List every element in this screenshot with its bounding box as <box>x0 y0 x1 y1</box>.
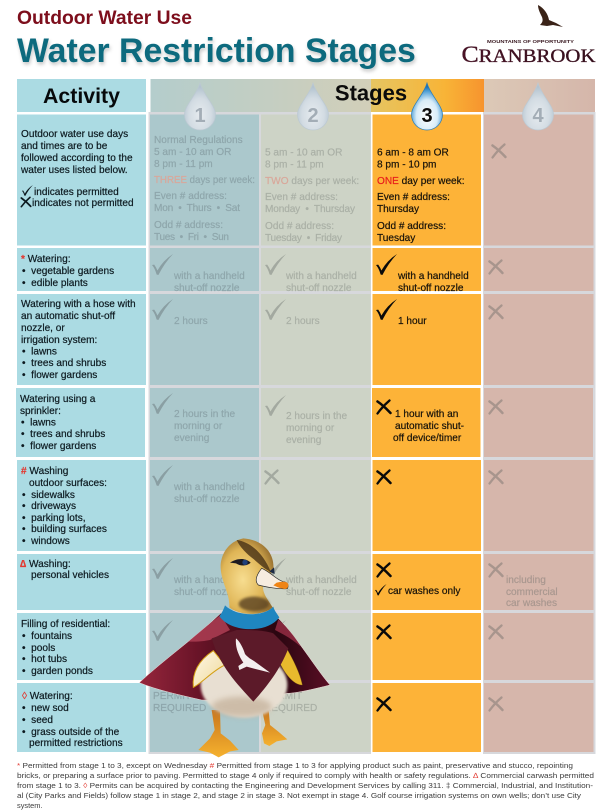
text: activity sprinkler: sprinkler: <box>20 406 61 417</box>
duck chest shield <box>212 630 288 702</box>
text: activity intro and legend: and times are to be <box>21 141 108 152</box>
text: activity sprinkler: • flower gardens <box>21 441 96 452</box>
duck beak <box>256 568 288 589</box>
text: activity hose watering: • trees and shrubs <box>22 358 106 369</box>
icon: drop stage 1 <box>184 83 216 130</box>
text: stage 2 regulations: Even # address: <box>265 192 338 203</box>
text: activity intro and legend: indicates permitted <box>34 187 119 198</box>
text: activity washing surfaces: • building surfaces <box>22 524 107 535</box>
stage 4 row marks and notes: commercial <box>506 587 558 598</box>
text: stage 1 regulations <box>154 135 255 243</box>
duck cape highlights <box>188 615 301 647</box>
text: stage 2 regulations: 5 am - 10 am OR <box>265 148 342 158</box>
stage 2 row marks and notes: morning or <box>286 423 335 434</box>
text: activity watering vegetables <box>21 254 114 289</box>
duck neck shading <box>239 597 269 611</box>
stage 1 row marks and notes: 2 hours in the <box>174 409 236 420</box>
text: stage 1 regulations: THREE days per week: <box>154 175 255 186</box>
logo tagline: MOUNTAINS OF OPPORTUNITY <box>487 39 575 45</box>
stage 2 row marks and notes: PERMIT <box>264 691 302 702</box>
text: stage 2 regulations: Odd # address: <box>265 221 334 232</box>
text: activity filling: • pools <box>22 643 55 654</box>
text: activity new sod: • seed <box>22 715 53 726</box>
stage 3 row marks and notes: automatic shut- <box>395 421 464 432</box>
footnotes: system. <box>17 801 42 810</box>
duck head and neck <box>221 538 273 614</box>
stage 2 row marks and notes: with a handheld <box>285 271 357 282</box>
stage 4 row marks and notes <box>490 144 558 710</box>
duck legs and feet <box>198 710 287 757</box>
duck eye <box>230 559 275 574</box>
icon: drop stage 3 <box>412 83 442 130</box>
text: stage 1 regulations: Normal Regulations <box>154 135 243 146</box>
text: activity watering vegetables: • edible plants <box>22 278 88 289</box>
text: stage 3 regulations: Even # address: <box>377 192 450 203</box>
text: stage 3 regulations: ONE day per week: <box>377 176 465 187</box>
text: stage 3 regulations: Odd # address: <box>377 221 446 232</box>
stage 3 row marks and notes: 1 hour with an <box>395 409 458 420</box>
footnotes <box>17 761 594 810</box>
icon: drop stage 2 <box>298 83 328 130</box>
text: stage 1 regulations: Even # address: <box>154 191 227 202</box>
stage 2 row marks and notes: evening <box>286 435 321 446</box>
panel: stages header band: Stages <box>335 80 407 106</box>
text: activity sprinkler <box>20 394 105 452</box>
text: activity washing surfaces <box>21 466 107 547</box>
panel: stage 1 column cells <box>150 114 259 752</box>
panel: activity column cells <box>16 114 146 752</box>
stage 2 row marks and notes: 2 hours in the <box>286 411 348 422</box>
stage 1 row marks and notes: shut-off nozzle <box>174 587 240 598</box>
text: activity new sod: ◊ Watering: <box>22 691 73 702</box>
text: activity intro and legend: water uses listed below. <box>20 165 128 176</box>
stage 1 row marks and notes: with a handheld <box>173 575 245 586</box>
stage 4 row marks and notes: including <box>506 575 546 586</box>
icon: drop stage 4: 4 <box>532 105 544 127</box>
stage 1 row marks and notes: with a handheld <box>173 482 245 493</box>
text: stage 1 regulations: Tues • Fri • Sun <box>154 232 229 243</box>
stage 3 row marks and notes: with a handheld <box>397 271 469 282</box>
stage 3 row marks and notes: off device/timer <box>393 433 462 444</box>
text: activity new sod: • grass outside of the <box>22 727 120 738</box>
text: activity washing vehicles: ∆ Washing: <box>20 559 71 570</box>
stage 1 row marks and notes: with a handheld <box>173 271 245 282</box>
text: activity hose watering <box>21 299 136 381</box>
text: activity washing surfaces: • sidewalks <box>22 490 75 501</box>
subtitle: Outdoor Water Use <box>17 8 192 29</box>
footnotes: from stage 1 to 3. ◊ Permits can be acquired by contacting the Engineering and Development Services by calling 311. ‡ Commercial, Industrial, and Institution- <box>17 781 594 790</box>
text: activity filling: • garden ponds <box>22 666 93 677</box>
text: activity new sod <box>22 691 123 749</box>
logo: Cranbrook <box>462 5 596 67</box>
text: activity filling: • hot tubs <box>22 654 67 665</box>
text: stage 2 regulations <box>265 148 359 244</box>
stage 1 row marks and notes: REQUIRED <box>153 703 206 714</box>
stage 3 row marks and notes: shut-off nozzle <box>398 283 464 294</box>
text: stage 3 regulations <box>377 148 465 244</box>
mascot: duck in cape <box>139 538 330 757</box>
text: activity sprinkler: Watering using a <box>20 394 96 405</box>
stage 1 row marks and notes: evening <box>174 433 209 444</box>
icon: drop stage 1: 1 <box>194 105 206 127</box>
stage 2 row marks and notes: shut-off nozzle <box>286 587 352 598</box>
stage 2 row marks and notes: shut-off nozzle <box>286 283 352 294</box>
stage 2 row marks and notes: 2 hours <box>286 316 320 327</box>
stage 1 row marks and notes: shut-off nozzle <box>174 283 240 294</box>
text: stage 1 regulations: Mon • Thurs • Sat <box>154 203 240 214</box>
text: activity washing surfaces: • driveways <box>22 501 76 512</box>
panel: stage 2 column cells <box>261 114 370 752</box>
panel: activity header: Activity <box>43 84 120 108</box>
text: activity sprinkler: • trees and shrubs <box>21 429 105 440</box>
text: activity sprinkler: • lawns <box>21 418 56 428</box>
stage 4 row marks and notes: car washes <box>506 598 557 609</box>
text: activity watering vegetables: • vegetable gardens <box>22 266 114 277</box>
duck collar <box>219 605 279 629</box>
stage 3 row marks and notes: car washes only <box>388 586 461 597</box>
text: activity filling <box>21 619 110 677</box>
icon: drop stage 4 <box>522 83 554 130</box>
text: stage 3 regulations: 6 am - 8 am OR <box>377 148 449 158</box>
text: stage 3 regulations: 8 pm - 10 pm <box>377 160 436 170</box>
duck belly <box>201 652 287 718</box>
text: activity washing vehicles: personal vehicles <box>31 570 109 581</box>
text: stage 1 regulations: 8 pm - 11 pm <box>154 159 213 170</box>
text: stage 2 regulations: TWO days per week: <box>265 176 359 187</box>
text: activity hose watering: • lawns <box>22 346 57 358</box>
panel: stage 3 column cells <box>372 114 481 752</box>
text: stage 2 regulations: Tuesday • Friday <box>265 233 343 244</box>
icon: drop stage 3: 3 <box>421 105 433 127</box>
icon: eagle <box>538 5 563 27</box>
text: activity filling: Filling of residential: <box>21 619 110 630</box>
stage 1 row marks and notes: PERMIT <box>153 691 191 702</box>
text: stage 1 regulations: Odd # address: <box>154 220 223 231</box>
text: activity intro and legend: followed according to the <box>21 153 133 164</box>
text: activity hose watering: • flower gardens <box>22 370 97 381</box>
duck shield bird emblem <box>236 638 270 673</box>
duck wings <box>193 648 302 687</box>
logo wordmark: CRANBROOK <box>462 42 596 67</box>
stage 3 row marks and notes <box>375 254 469 710</box>
text: activity hose watering: Watering with a hose with <box>21 299 136 310</box>
stage 2 row marks and notes: with a handheld <box>285 575 357 586</box>
duck cape <box>139 613 330 702</box>
icon: drop stage 2: 2 <box>307 105 319 127</box>
text: activity watering vegetables: * Watering: <box>21 254 71 265</box>
stage 1 row marks and notes: 2 hours <box>174 316 208 327</box>
stage 2 row marks and notes <box>264 254 357 714</box>
panel: stages header band <box>150 79 595 112</box>
text: activity washing surfaces: outdoor surfaces: <box>29 478 107 489</box>
text: activity hose watering: irrigation system: <box>21 335 97 346</box>
text: activity intro and legend: Outdoor water use days <box>21 129 128 140</box>
text: stage 2 regulations: Monday • Thursday <box>265 204 356 215</box>
text: stage 2 regulations: 8 pm - 11 pm <box>265 160 324 170</box>
text: activity hose watering: nozzle, or <box>21 323 65 334</box>
stage 1 row marks and notes <box>152 254 245 714</box>
footnotes: * Permitted from stage 1 to 3, except on Wednesday # Permitted from stage 1 to 3 for applying product such as paint, preservative and stucco, repointing <box>17 761 573 770</box>
text: activity intro and legend <box>20 129 134 209</box>
duck head stripe <box>237 540 271 572</box>
text: activity intro and legend: indicates not permitted <box>32 198 134 209</box>
text: activity filling: • fountains <box>22 631 72 642</box>
stage 3 row marks and notes: 1 hour <box>398 316 427 327</box>
stage 1 row marks and notes: shut-off nozzle <box>174 494 240 505</box>
text: stage 1 regulations: 5 am - 10 am OR <box>154 147 231 158</box>
panel: activity header <box>17 79 146 112</box>
panel: stage 4 column cells <box>484 114 594 752</box>
text: activity new sod: permitted restrictions <box>29 738 123 749</box>
text: stage 3 regulations: Tuesday <box>377 233 416 244</box>
text: activity new sod: • new sod <box>22 703 69 714</box>
table grid background <box>148 112 596 754</box>
text: activity washing vehicles <box>20 559 109 581</box>
text: activity washing surfaces: • windows <box>22 536 70 547</box>
text: stage 3 regulations: Thursday <box>377 204 420 215</box>
stage 1 row marks and notes: morning or <box>174 421 223 432</box>
footnotes: al (City Parks and Fields) follow stage 1 in stage 2, and stage 2 in stage 3. Not exempt in stage 4. Golf course irrigation systems on own wells; don’t use City <box>17 791 581 800</box>
footnotes: bricks, or preparing a surface prior to paving. Permitted to stage 4 only if required to comply with health or safety regulations. ∆ Commercial carwash permitted <box>17 771 594 780</box>
text: activity washing surfaces: • parking lots, <box>22 513 86 524</box>
text: activity hose watering: an automatic shut-off <box>21 311 115 322</box>
stage 2 row marks and notes: REQUIRED <box>264 703 317 714</box>
text: activity washing surfaces: # Washing <box>21 466 68 477</box>
title: Water Restriction Stages <box>17 32 416 70</box>
